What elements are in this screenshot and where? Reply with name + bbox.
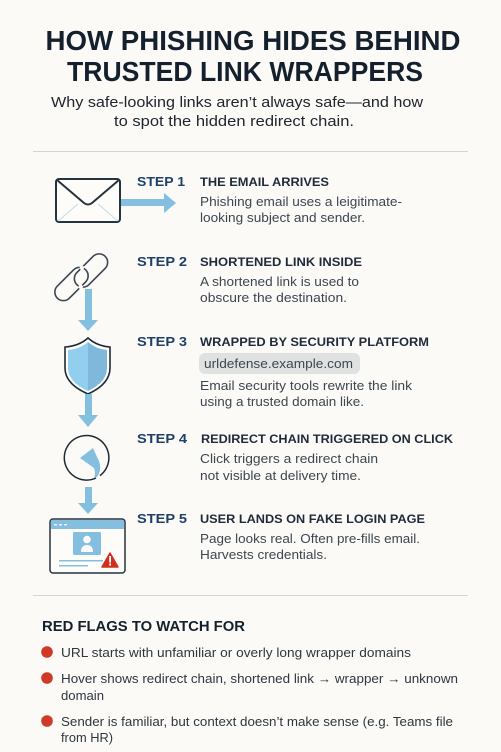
arrow: step 2 to step 3: [78, 289, 98, 331]
step 2: [137, 254, 362, 305]
icon: redirect circle: [64, 435, 109, 480]
step 1: Phishing email uses a leigitimate-: [200, 195, 402, 209]
step 1: STEP 1: [137, 174, 185, 189]
step 5: USER LANDS ON FAKE LOGIN PAGE: [200, 512, 425, 526]
icon: shield: [65, 338, 110, 394]
icon: envelope: [56, 179, 120, 222]
step 3: WRAPPED BY SECURITY PLATFORM: [200, 335, 429, 349]
red flag 3: Sender is familiar, but context doesn’t make sense (e.g. Teams file: [61, 715, 453, 729]
icon: warning triangle: [102, 553, 118, 567]
url pill: urldefense.example.com: [204, 356, 353, 371]
step 2: SHORTENED LINK INSIDE: [200, 255, 362, 269]
step 4: Click triggers a redirect chain: [200, 452, 378, 466]
subtitle: Why safe-looking links aren’t always safe—and how: [51, 94, 423, 111]
red flags heading: RED FLAGS TO WATCH FOR: [42, 619, 246, 635]
icon: chain link: [51, 250, 111, 304]
url pill: [199, 353, 360, 374]
step 5: STEP 5: [137, 511, 187, 526]
step 5: Harvests credentials.: [200, 548, 327, 562]
step 5: Page looks real. Often pre-fills email.: [200, 532, 420, 546]
title: [46, 25, 460, 87]
arrow: envelope to step 1: [121, 193, 176, 213]
red flag 2: Hover shows redirect chain, shortened link → wrapper → unknown: [61, 672, 458, 686]
red flag 1: URL starts with unfamiliar or overly long wrapper domains: [61, 646, 411, 660]
step 1: [137, 174, 402, 225]
arrow: step 4 to step 5: [78, 487, 98, 514]
step 4: not visible at delivery time.: [200, 469, 361, 483]
red flag 2: [41, 672, 458, 703]
red flag 3: from HR): [61, 731, 113, 745]
step 4: REDIRECT CHAIN TRIGGERED ON CLICK: [201, 432, 453, 446]
step 3: Email security tools rewrite the link: [200, 379, 413, 393]
subtitle: [51, 94, 423, 130]
step 1: THE EMAIL ARRIVES: [200, 175, 329, 189]
step 3: STEP 3: [137, 334, 187, 349]
title: HOW PHISHING HIDES BEHIND: [46, 25, 460, 56]
icon: fake login page: [50, 519, 125, 573]
red flag 3: [41, 715, 453, 745]
step 4: STEP 4: [137, 431, 188, 446]
step 2: STEP 2: [137, 254, 187, 269]
red flag 2: domain: [61, 689, 104, 703]
step 1: looking subject and sender.: [200, 211, 365, 225]
step 4: [137, 431, 453, 483]
step 3: using a trusted domain like.: [200, 395, 364, 409]
step 3: [137, 334, 429, 409]
step 2: obscure the destination.: [200, 291, 347, 305]
subtitle: to spot the hidden redirect chain.: [114, 113, 354, 130]
step 2: A shortened link is used to: [200, 275, 359, 289]
step 5: [137, 511, 425, 562]
arrow: step 3 to step 4: [78, 394, 98, 427]
title: TRUSTED LINK WRAPPERS: [67, 56, 423, 87]
